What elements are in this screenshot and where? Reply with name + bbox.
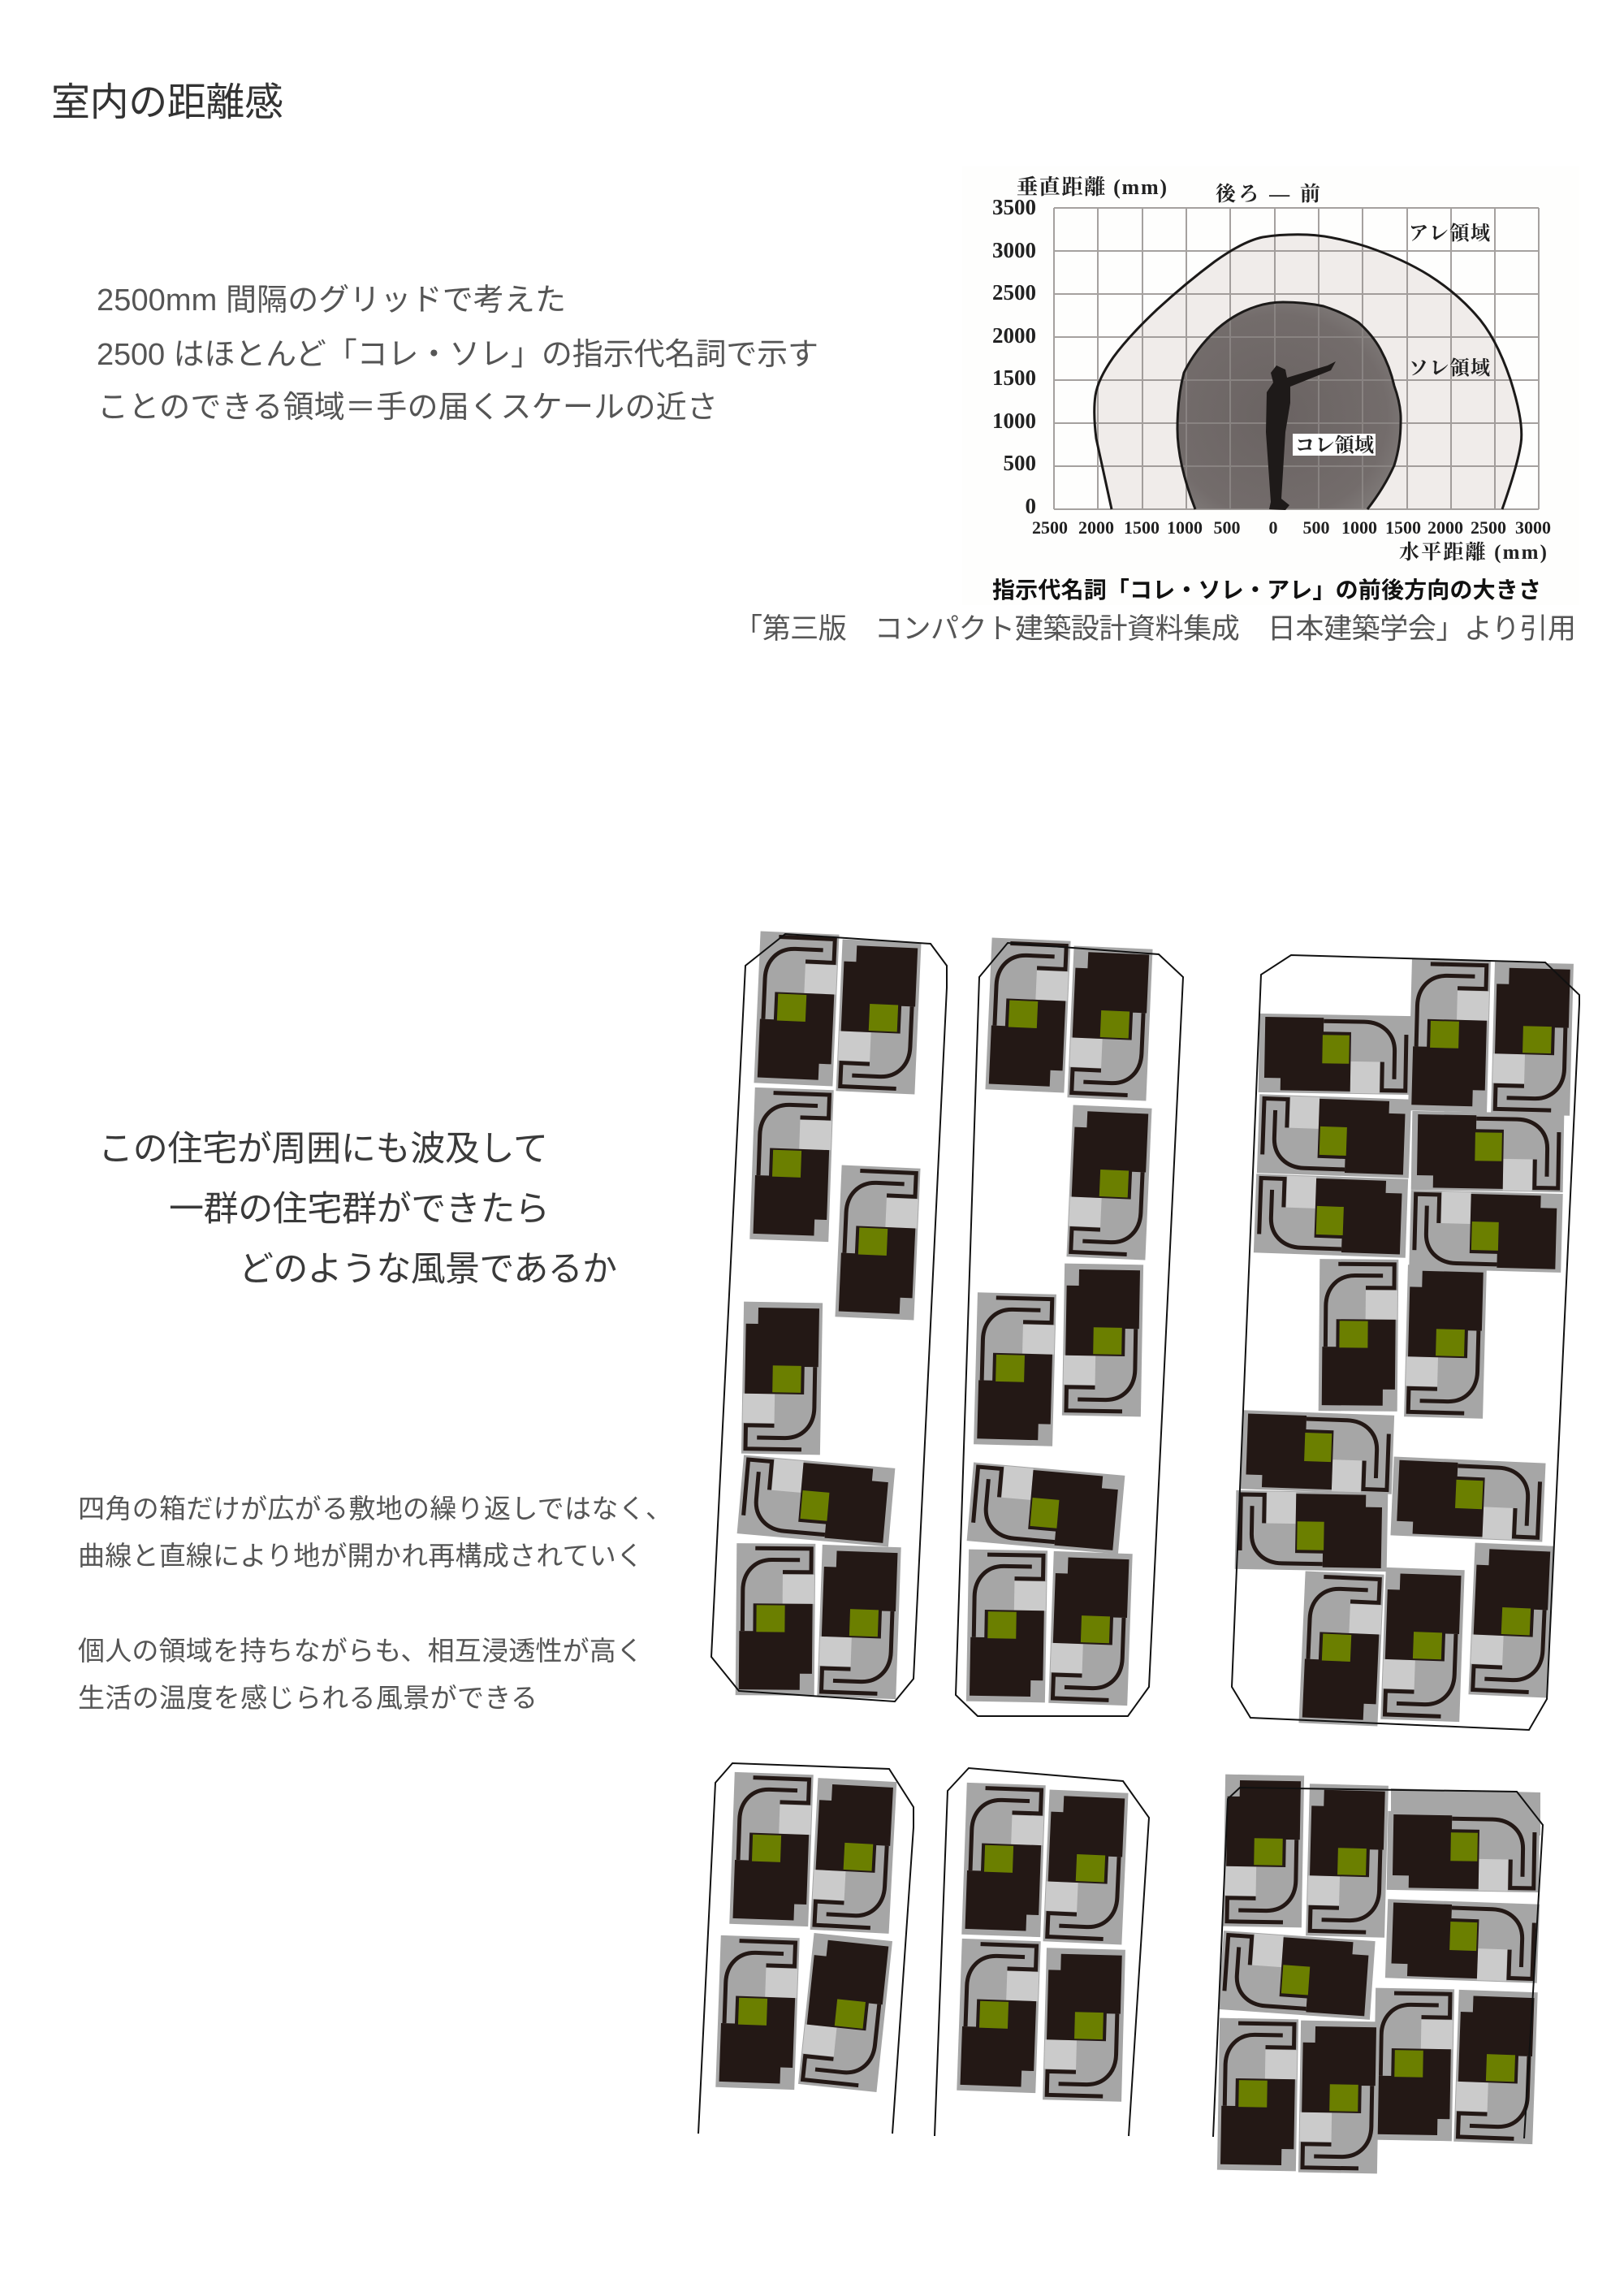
heading: housing cluster question: 一群の住宅群ができたら <box>169 1190 550 1229</box>
site plan: block 6 <box>1213 1775 1543 2173</box>
text block: landscape description <box>78 1494 672 1713</box>
y axis labels: 2000 <box>992 323 1036 348</box>
x axis labels: 500 <box>1302 517 1330 538</box>
icon: standing person pointing <box>1266 361 1336 510</box>
y axis labels: 0 <box>1025 494 1036 518</box>
text block: grid explanation: 2500 はほとんど「コレ・ソレ」の指示代名詞で示す <box>97 338 818 372</box>
text block: grid explanation <box>97 283 818 425</box>
site plan: block 2 <box>956 937 1183 1716</box>
heading: housing cluster question <box>98 1130 617 1289</box>
y axis labels: 1500 <box>992 365 1036 390</box>
site plan: block 5 <box>935 1768 1149 2136</box>
citation: 「第三版 コンパクト建築設計資料集成 日本建築学会」より引用 <box>734 613 1576 645</box>
heading: housing cluster question: この住宅が周囲にも波及して <box>98 1130 548 1169</box>
x axis labels: 2000 <box>1078 517 1114 538</box>
text block: grid explanation: ことのできる領域＝手の届くスケールの近さ <box>97 391 718 425</box>
chart: demonstrative pronoun zones <box>962 166 1579 605</box>
text block: landscape description: 個人の領域を持ちながらも、相互浸透性が高く <box>78 1636 643 1666</box>
text block: landscape description: 生活の温度を感じられる風景ができる <box>78 1683 538 1713</box>
heading: housing cluster question: どのような風景であるか <box>239 1250 617 1289</box>
zone label: sore: ソレ領域 <box>1409 357 1490 379</box>
x axis labels <box>1032 517 1551 538</box>
x axis labels: 2500 <box>1032 517 1068 538</box>
y axis labels <box>992 195 1036 518</box>
y axis title: 垂直距離 (mm) <box>1017 175 1167 199</box>
chart caption: 指示代名詞「コレ・ソレ・アレ」の前後方向の大きさ <box>992 577 1541 603</box>
y axis labels: 1000 <box>992 409 1036 433</box>
y axis labels: 2500 <box>992 280 1036 305</box>
direction label: 後ろ ― 前 <box>1216 183 1320 205</box>
x axis labels: 0 <box>1268 517 1278 538</box>
site plan: block 1 <box>711 931 947 1701</box>
text block: grid explanation: 2500mm 間隔のグリッドで考えた <box>97 283 566 318</box>
site plan: block 4 <box>698 1763 914 2134</box>
chart outline: sore zone boundary <box>1177 302 1401 509</box>
x axis labels: 3000 <box>1515 517 1551 538</box>
text block: landscape description: 曲線と直線により地が開かれ再構成されていく <box>78 1541 643 1571</box>
x axis labels: 2500 <box>1471 517 1506 538</box>
x axis title: 水平距離 (mm) <box>1399 541 1547 564</box>
chart outline: are zone boundary <box>1095 235 1522 509</box>
site plan: block 3 <box>1232 955 1579 1730</box>
x axis labels: 1500 <box>1124 517 1160 538</box>
x axis labels: 1500 <box>1385 517 1421 538</box>
x axis labels: 500 <box>1213 517 1241 538</box>
x axis labels: 1000 <box>1167 517 1203 538</box>
chart area: kore sore zone <box>1177 302 1401 509</box>
text block: landscape description: 四角の箱だけが広がる敷地の繰り返しではなく、 <box>78 1494 672 1524</box>
zone label: kore: コレ領域 <box>1295 435 1374 456</box>
y axis labels: 3000 <box>992 238 1036 262</box>
title: 室内の距離感 <box>51 81 283 124</box>
y axis labels: 3500 <box>992 195 1036 219</box>
x axis labels: 1000 <box>1341 517 1377 538</box>
y axis labels: 500 <box>1004 451 1036 475</box>
zone label: are: アレ領域 <box>1409 223 1490 244</box>
chart area: are zone <box>1095 235 1522 509</box>
x axis labels: 2000 <box>1427 517 1463 538</box>
